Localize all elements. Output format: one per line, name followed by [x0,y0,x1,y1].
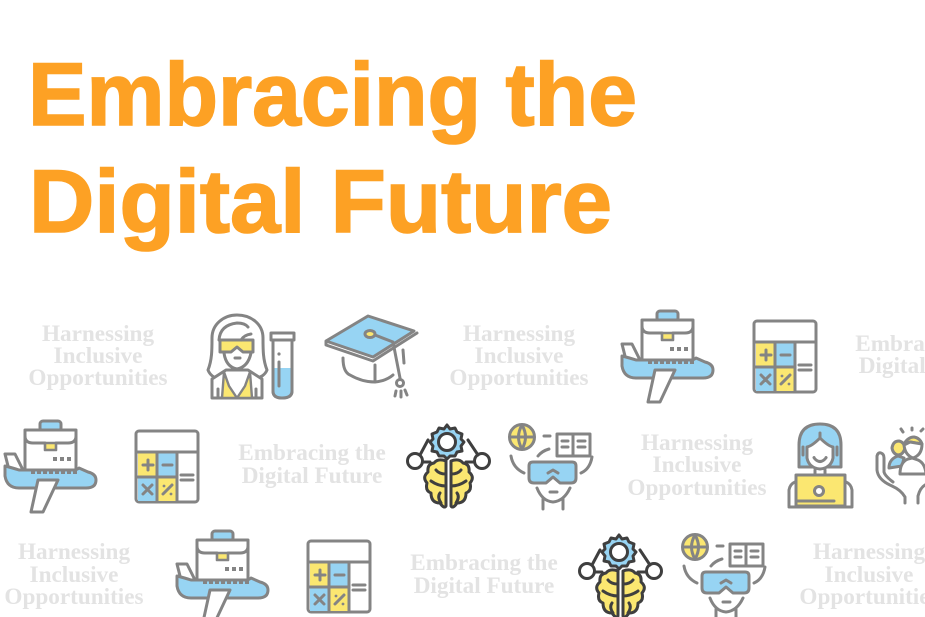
caption: harnessing row 3 left: Inclusive [30,562,118,588]
icon: airplane with briefcase row 2 [5,421,96,512]
caption: harnessing row 1 centre: Harnessing [463,321,575,347]
icon: calculator row 1 [754,321,816,392]
caption: harnessing row 3 left: Harnessing [18,539,130,565]
icon: person with laptop [789,424,852,507]
title: Embracing the [28,44,637,144]
icon: brain and gear row 2 [408,425,490,507]
icon: brain and gear row 3 [580,535,662,617]
icon: calculator row 2 [136,431,198,502]
caption: harnessing row 1 centre: Opportunities [449,365,589,391]
caption: harnessing row 1 left: Opportunities [28,365,168,391]
caption: harnessing row 1 left: Harnessing [42,321,154,347]
icon: calculator row 3 [308,541,370,612]
caption: harnessing row 2: Harnessing [641,430,753,456]
caption: harnessing row 2: Opportunities [627,475,767,501]
icon: airplane with briefcase row 3 [177,531,268,617]
title [28,44,637,251]
title: Digital Future [29,151,612,251]
caption: harnessing row 3 right: Inclusive [825,562,913,588]
icon: VR headset row 2 [510,424,592,509]
caption: harnessing row 2: Inclusive [653,452,741,478]
caption: embracing row 2: Embracing the [238,440,386,466]
caption: embracing row 3: Embracing the [410,550,558,576]
icon: scientist with test tube [208,315,294,398]
caption: harnessing row 1 centre: Inclusive [475,343,563,369]
icon: airplane with briefcase row 1 [622,311,713,402]
caption: embracing row 2: Digital Future [242,463,382,489]
caption: harnessing row 3 left: Opportunities [4,584,144,610]
icon: VR headset row 3 [682,534,765,617]
icon: graduation cap [326,316,417,397]
caption: embracing row 3: Digital Future [414,573,554,599]
caption: harnessing row 1 left: Inclusive [54,343,142,369]
icon: hands holding people [877,428,925,503]
caption: harnessing row 3 right: Harnessing [813,539,925,565]
